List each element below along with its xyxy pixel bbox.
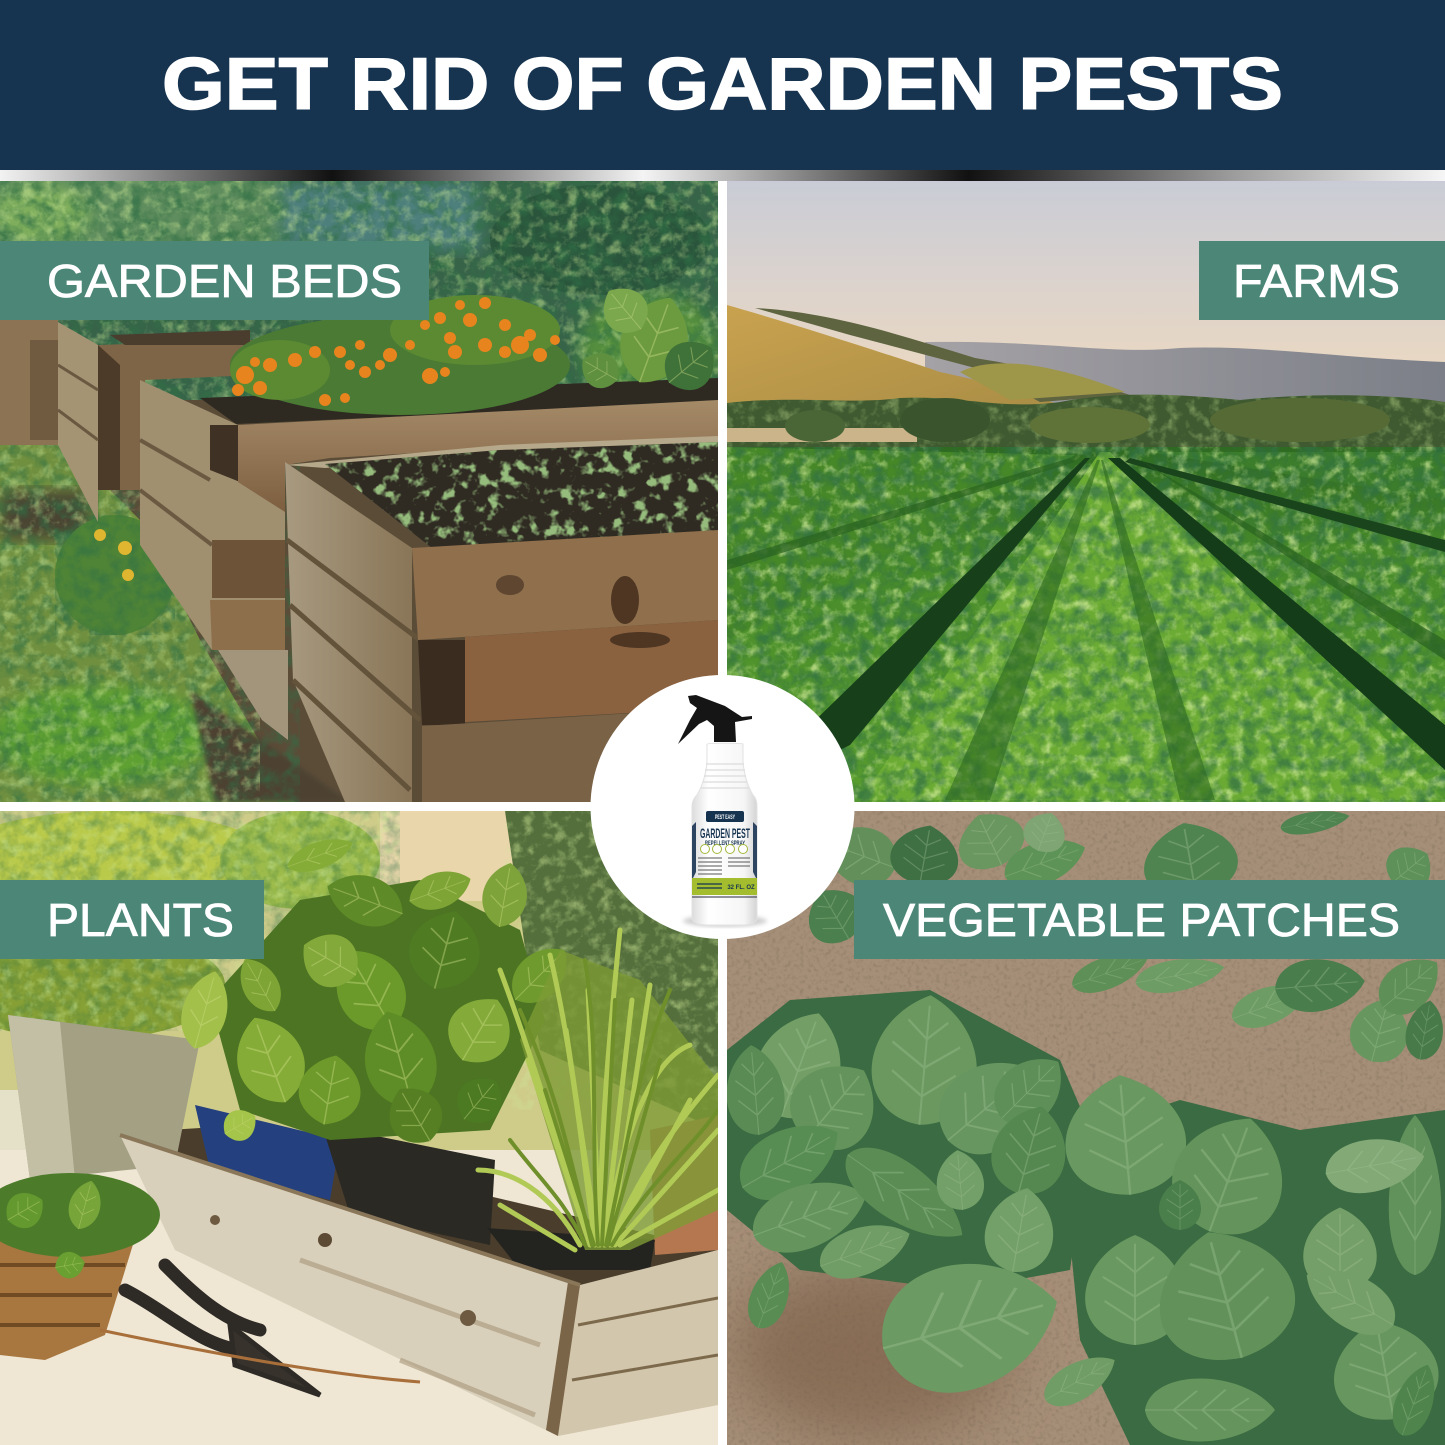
bottle body (692, 743, 757, 925)
metallic gradient strip (0, 170, 1445, 181)
bottle shadow (683, 915, 767, 927)
front raised bed (285, 440, 718, 802)
title: GET RID OF GARDEN PESTS (162, 44, 1283, 125)
twine line (100, 1330, 420, 1382)
header band (0, 0, 1445, 170)
label: vegetable patches: VEGETABLE PATCHES (883, 894, 1400, 946)
spinach back row (796, 801, 1445, 1069)
product label (692, 811, 757, 897)
third bed with soil (140, 378, 718, 650)
bottle ribs (701, 764, 749, 788)
sandy soil (727, 811, 1445, 1445)
panel: plants (0, 811, 718, 1445)
label: garden beds: GARDEN BEDS (47, 255, 402, 307)
far raised beds (0, 320, 255, 522)
product label: REPELLENT SPRAY (705, 841, 745, 847)
chives (478, 930, 718, 1250)
product label: PEST EASY (715, 814, 735, 821)
far hills (925, 342, 1445, 430)
label: plants: PLANTS (47, 894, 234, 946)
panel: vegetable patches (722, 801, 1445, 1445)
basket of herbs (0, 1173, 160, 1360)
rosemary (505, 811, 718, 1130)
panel: garden beds (0, 181, 727, 802)
product label: 32 FL. OZ (727, 885, 755, 891)
panel: farms (727, 181, 1445, 802)
right foliage (574, 277, 727, 401)
golden hills (727, 305, 1130, 410)
pots (8, 1015, 718, 1270)
tree line (727, 385, 1445, 450)
sky (727, 181, 1445, 371)
wooden crate (120, 1135, 718, 1436)
marigold flowers (230, 295, 570, 415)
label: farms (1199, 241, 1445, 320)
background foliage (0, 181, 720, 410)
label: plants (0, 880, 264, 959)
pruning shears (125, 1265, 320, 1395)
grass and path (0, 400, 718, 802)
yellow-green foliage (0, 811, 400, 1040)
basil leaves (173, 831, 580, 1154)
sprayer head (678, 695, 752, 744)
backdrop wall and shelf (0, 811, 718, 1445)
label: vegetable patches (854, 880, 1445, 959)
crate interior (120, 1128, 718, 1288)
product: spray bottle (678, 695, 767, 927)
product label: GARDEN PEST (700, 825, 750, 841)
label: farms: FARMS (1233, 255, 1400, 307)
label: garden beds (0, 241, 429, 320)
product badge: white circle (590, 675, 854, 939)
lettuce field (727, 447, 1445, 802)
spinach foreground cluster (722, 990, 1445, 1445)
